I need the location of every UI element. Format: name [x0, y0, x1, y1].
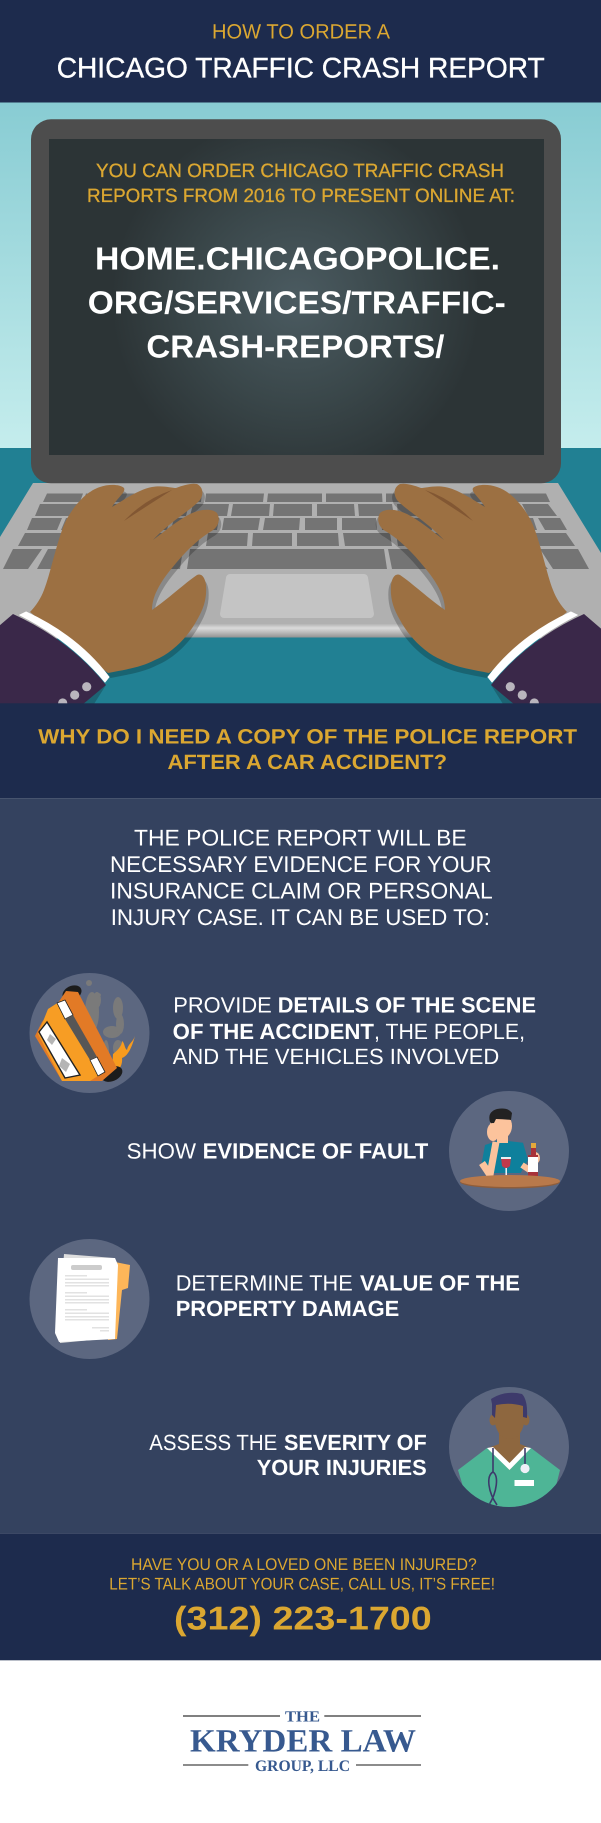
item 3 text: VALUE OF THE: [360, 1271, 520, 1296]
question heading: AFTER A CAR ACCIDENT?: [168, 751, 447, 774]
footer text: [109, 1555, 495, 1593]
left hand typing: [0, 484, 221, 708]
intro text: INSURANCE CLAIM OR PERSONAL: [110, 878, 493, 904]
item 2 text: SHOW: [127, 1138, 196, 1163]
item 4 text: SEVERITY OF: [284, 1430, 427, 1455]
icon: man drinking wine at table: [449, 1091, 569, 1211]
screen intro text: REPORTS FROM 2016 TO PRESENT ONLINE AT:: [87, 186, 515, 207]
hero illustration: laptop on desk: [0, 102, 601, 708]
logo: The Kryder Law Group, LLC: KRYDER LAW: [190, 1724, 416, 1760]
question heading: [38, 725, 577, 774]
footer text: LET’S TALK ABOUT YOUR CASE, CALL US, IT’S FREE!: [109, 1574, 495, 1593]
footer call to action: [0, 1533, 601, 1660]
screen URL: CRASH-REPORTS/: [146, 329, 445, 365]
item 4 text: [149, 1430, 427, 1480]
header band: [0, 0, 601, 102]
intro text: INJURY CASE. IT CAN BE USED TO:: [111, 904, 490, 930]
question band: [0, 703, 601, 798]
item 4 text: YOUR INJURIES: [257, 1455, 427, 1480]
intro text: NECESSARY EVIDENCE FOR YOUR: [110, 851, 492, 877]
keyboard keys: [3, 494, 589, 569]
item 4 text: ASSESS THE: [149, 1430, 277, 1455]
main title: CHICAGO TRAFFIC CRASH REPORT: [57, 52, 545, 84]
item 3 text: PROPERTY DAMAGE: [176, 1296, 399, 1321]
icon: doctor with stethoscope: [449, 1387, 569, 1510]
laptop screen: [49, 139, 544, 455]
front edge of laptop: [100, 624, 500, 638]
item 1 text: , THE PEOPLE,: [374, 1019, 525, 1044]
footer text: HAVE YOU OR A LOVED ONE BEEN INJURED?: [131, 1555, 477, 1574]
intro text: [110, 825, 493, 930]
logo: The Kryder Law Group, LLC: [183, 1709, 421, 1775]
item 3 text: DETERMINE THE: [176, 1271, 353, 1296]
icon: stack of documents: [30, 1239, 150, 1359]
item 1 text: PROVIDE: [173, 993, 272, 1018]
item 1 text: [173, 993, 536, 1069]
item 2 text: EVIDENCE OF FAULT: [203, 1138, 429, 1163]
logo: The Kryder Law Group, LLC: THE: [285, 1709, 320, 1726]
header kicker: HOW TO ORDER A: [212, 20, 390, 43]
screen URL: HOME.CHICAGOPOLICE.: [95, 240, 500, 276]
icon: overturned burning car: [30, 973, 150, 1093]
item 1 text: OF THE ACCIDENT: [173, 1019, 375, 1044]
phone number: (312) 223-1700: [174, 1599, 432, 1636]
item 1 text: AND THE VEHICLES INVOLVED: [173, 1044, 499, 1069]
laptop lid: [31, 119, 561, 483]
logo: The Kryder Law Group, LLC: GROUP, LLC: [255, 1758, 350, 1775]
item 1 text: DETAILS OF THE SCENE: [278, 993, 536, 1018]
screen URL: [88, 240, 506, 365]
screen intro text: [87, 161, 515, 207]
question heading: WHY DO I NEED A COPY OF THE POLICE REPORT: [38, 725, 577, 748]
trackpad: [224, 578, 370, 614]
item 3 text: [176, 1271, 520, 1321]
screen URL: ORG/SERVICES/TRAFFIC-: [88, 284, 506, 320]
right hand typing: [376, 484, 601, 708]
intro text: THE POLICE REPORT WILL BE: [134, 825, 467, 851]
screen intro text: YOU CAN ORDER CHICAGO TRAFFIC CRASH: [96, 161, 504, 182]
laptop base: [0, 483, 601, 640]
panel: uses of the police report: [0, 798, 601, 1533]
